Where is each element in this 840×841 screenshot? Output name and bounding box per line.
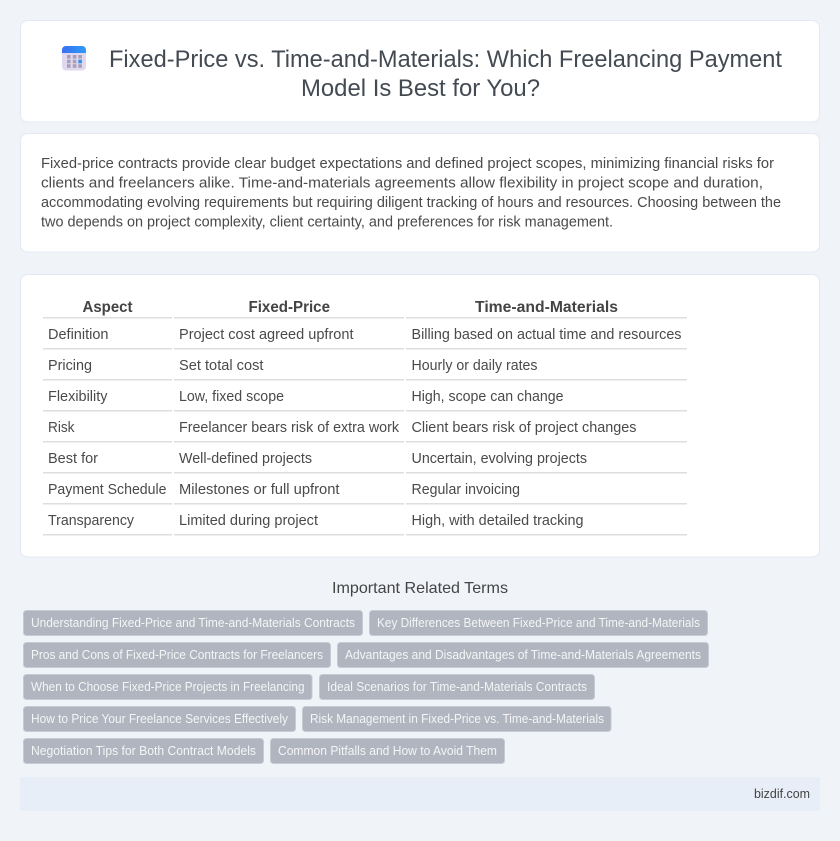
row: payment schedule: Regular invoicing xyxy=(412,482,520,498)
panel: related term tags xyxy=(24,610,708,764)
tag: When to Choose Fixed-Price Projects in Freelancing xyxy=(31,680,305,694)
text block: description: Fixed-price contracts provide clear budget expectations and defined project scopes, minimizing financial risks for xyxy=(41,156,774,172)
tag xyxy=(320,674,594,700)
panel: header xyxy=(20,20,820,122)
row: definition: Definition xyxy=(48,327,108,343)
title: Fixed-Price vs. Time-and-Materials: Which Freelancing Payment xyxy=(109,46,782,73)
row: flexibility: High, scope can change xyxy=(412,389,564,405)
row: flexibility xyxy=(48,389,564,405)
tag: Understanding Fixed-Price and Time-and-Materials Contracts xyxy=(31,616,355,630)
row: best for xyxy=(48,451,587,467)
footer source text: bizdif.com xyxy=(754,787,810,801)
row: risk: Freelancer bears risk of extra work xyxy=(179,420,400,436)
row: transparency: High, with detailed tracking xyxy=(412,513,584,529)
row: best for: Uncertain, evolving projects xyxy=(412,451,587,467)
row: transparency: Limited during project xyxy=(179,513,318,529)
tag: Advantages and Disadvantages of Time-and-Materials Agreements xyxy=(345,648,701,662)
text block: description: clients and freelancers alike. Time-and-materials agreements allow flexibility in project scope and duration, xyxy=(41,176,763,192)
row: best for: Well-defined projects xyxy=(179,451,312,467)
row: payment schedule xyxy=(48,482,520,498)
row: payment schedule: Milestones or full upfront xyxy=(179,482,340,498)
row: flexibility: Low, fixed scope xyxy=(179,389,284,405)
tag xyxy=(24,642,330,668)
tag xyxy=(24,674,312,700)
row: risk xyxy=(48,420,636,436)
icon: calendar xyxy=(62,46,86,70)
row: pricing: Pricing xyxy=(48,358,92,374)
text block: description: two depends on project complexity, client certainty, and preferences for risk management. xyxy=(41,214,613,230)
text block: description xyxy=(41,156,781,230)
table header row xyxy=(82,299,618,316)
footer xyxy=(20,777,820,811)
heading: related terms: Important Related Terms xyxy=(332,580,508,597)
row: risk: Client bears risk of project changes xyxy=(412,420,636,436)
row: best for: Best for xyxy=(48,451,98,467)
row: payment schedule: Payment Schedule xyxy=(48,482,166,498)
row: pricing: Set total cost xyxy=(179,358,264,374)
table grid lines xyxy=(43,318,687,535)
table header row: Fixed-Price xyxy=(248,299,330,316)
tag xyxy=(370,610,708,636)
title xyxy=(109,46,782,102)
tag xyxy=(24,738,264,764)
tag: Risk Management in Fixed-Price vs. Time-and-Materials xyxy=(310,712,604,726)
panel: description xyxy=(20,134,820,252)
row: flexibility: Flexibility xyxy=(48,389,108,405)
tag xyxy=(24,706,296,732)
tag xyxy=(302,706,611,732)
row: definition: Project cost agreed upfront xyxy=(179,327,354,343)
tag: Ideal Scenarios for Time-and-Materials Contracts xyxy=(327,680,587,694)
row: pricing xyxy=(48,358,538,374)
tag: Pros and Cons of Fixed-Price Contracts for Freelancers xyxy=(31,648,323,662)
tag: Common Pitfalls and How to Avoid Them xyxy=(278,744,497,758)
row: transparency: Transparency xyxy=(48,513,135,529)
table header row: Aspect xyxy=(82,299,133,316)
panel: comparison table xyxy=(20,274,820,557)
row: pricing: Hourly or daily rates xyxy=(412,358,538,374)
tag xyxy=(270,738,504,764)
tag xyxy=(338,642,708,668)
tag xyxy=(24,610,362,636)
table header row: Time-and-Materials xyxy=(475,299,618,316)
row: definition: Billing based on actual time and resources xyxy=(412,327,682,343)
tag: How to Price Your Freelance Services Effectively xyxy=(31,712,289,726)
text block: description: accommodating evolving requirements but requiring diligent tracking of hours and resources. Choosing between the xyxy=(41,195,781,211)
tag: Key Differences Between Fixed-Price and Time-and-Materials xyxy=(377,616,700,630)
tag: Negotiation Tips for Both Contract Models xyxy=(31,744,256,758)
row: risk: Risk xyxy=(48,420,75,436)
row: transparency xyxy=(48,513,584,529)
row: definition xyxy=(48,327,682,343)
title: Model Is Best for You? xyxy=(301,75,540,102)
